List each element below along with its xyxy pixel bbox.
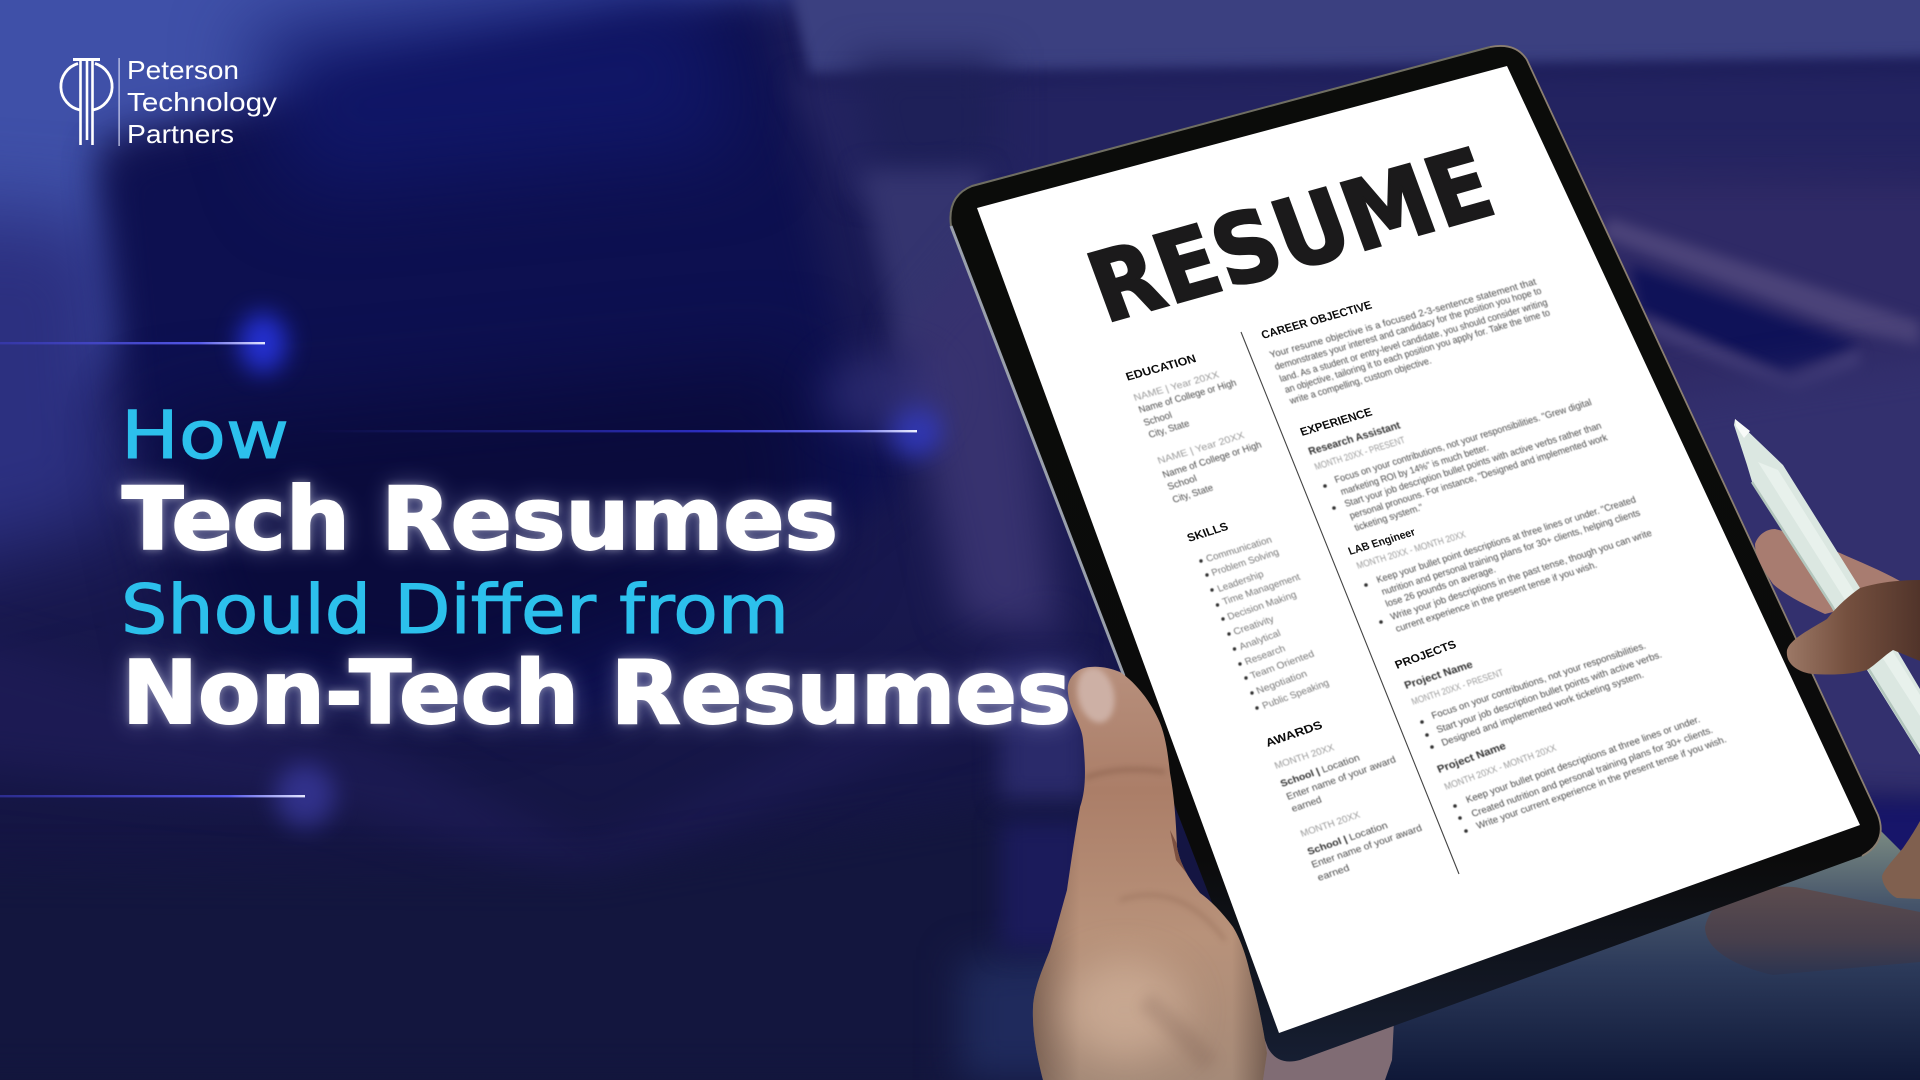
front finger over stylus: [1787, 580, 1920, 675]
tablet: [950, 46, 1881, 1062]
section: projects: MONTH 20XX - MONTH 20XX: [1443, 743, 1559, 793]
section: awards: School | Location: [1306, 820, 1390, 858]
section: education: City, State: [1171, 483, 1215, 506]
section: education: Name of College or High: [1137, 378, 1238, 416]
section: experience: Start your job description bullet points with active verbs rather than: [1343, 421, 1603, 510]
resume heading: RESUME: [1074, 127, 1508, 345]
section: skills: Negotiation: [1255, 669, 1309, 697]
title: How: [121, 397, 289, 474]
logo: Peterson Technology Partners: Technology: [127, 87, 277, 117]
tablet body: [950, 46, 1881, 1062]
section: education: EDUCATION: [1124, 353, 1198, 384]
section: experience: MONTH 20XX - PRESENT: [1313, 435, 1407, 473]
section: projects: Start your job description bullet points with active verbs.: [1435, 650, 1664, 736]
section: experience: nutrition and personal training plans for 30+ clients, helping clients: [1380, 508, 1642, 598]
section: experience: EXPERIENCE: [1299, 407, 1374, 439]
section: experience: LAB Engineer: [1347, 526, 1418, 558]
tablet screen: [977, 66, 1860, 1033]
section: projects: Designed and implemented work ticketing system.: [1440, 670, 1646, 749]
section: career objective: an objective, tailoring it to each position you apply for. Take the time to: [1283, 308, 1552, 396]
section: projects: Write your current experience in the present tense if you wish.: [1475, 734, 1728, 832]
index fingertip behind stylus: [1755, 529, 1900, 614]
section: experience: Research Assistant: [1307, 419, 1403, 458]
section: career objective: write a compelling, custom objective.: [1287, 356, 1433, 407]
section: education: [1124, 353, 1263, 506]
section: projects: Keep your bullet point descriptions at three lines or under.: [1464, 714, 1702, 806]
section: education: NAME | Year 20XX: [1156, 430, 1247, 467]
glow accent lines: [0, 313, 941, 828]
section: career objective: CAREER OBJECTIVE: [1260, 300, 1374, 342]
section: skills: Communication: [1204, 535, 1274, 565]
section: skills: Analytical: [1238, 628, 1283, 653]
section: career objective: Your resume objective is a focused 2-3-sentence statement that: [1268, 277, 1538, 361]
lower right finger: [1882, 821, 1920, 899]
section: education: School: [1166, 473, 1199, 493]
section: awards: MONTH 20XX: [1299, 810, 1362, 840]
section: experience: [1299, 397, 1654, 635]
section: skills: Decision Making: [1226, 590, 1298, 623]
section: career objective: demonstrates your interest and candidacy for the position you hope to: [1273, 286, 1543, 373]
logo: Peterson Technology Partners: Peterson: [127, 55, 239, 85]
section: education: City, State: [1147, 418, 1191, 441]
section: skills: Creativity: [1232, 614, 1276, 638]
section: projects: Focus on your contributions, not your responsibilities.: [1430, 641, 1648, 722]
section: experience: ticketing system.": [1353, 502, 1425, 534]
section: experience: marketing ROI by 14%" is much better.: [1339, 443, 1490, 498]
section: skills: Research: [1243, 643, 1287, 668]
section: projects: Created nutrition and personal training plans for 30+ clients.: [1470, 725, 1715, 820]
section: experience: lose 26 pounds on average.: [1384, 564, 1498, 610]
section: awards: [1264, 719, 1424, 884]
section: awards: earned: [1290, 795, 1323, 815]
section: awards: School | Location: [1279, 753, 1362, 790]
section: education: School: [1142, 410, 1174, 429]
column divider: [1241, 332, 1459, 874]
title: Should Differ from: [121, 571, 789, 650]
title: [121, 397, 1071, 744]
section: awards: Enter name of your award: [1285, 754, 1398, 803]
section: skills: Time Management: [1221, 572, 1302, 608]
palm behind tablet: [1260, 1000, 1395, 1080]
title: Tech Resumes: [122, 470, 838, 570]
title: Non-Tech Resumes: [122, 642, 1071, 744]
section: projects: [1393, 639, 1728, 833]
logo mark: [61, 60, 112, 145]
bottom right gradient surface: [1280, 830, 1920, 1080]
section: skills: Problem Solving: [1210, 547, 1281, 579]
section: awards: earned: [1316, 863, 1351, 884]
section: awards: Enter name of your award: [1310, 823, 1424, 871]
section: experience: current experience in the present tense if you wish.: [1394, 560, 1599, 635]
thumb of lower right hand: [1705, 887, 1920, 975]
section: skills: Public Speaking: [1261, 678, 1331, 712]
section: experience: Keep your bullet point descriptions at three lines or under. "Created: [1375, 495, 1638, 586]
logo: Peterson Technology Partners: [61, 55, 277, 149]
section: career objective: [1260, 277, 1552, 407]
section: skills: [1186, 521, 1331, 712]
left hand holding tablet: [1033, 664, 1267, 1080]
section: skills: SKILLS: [1186, 521, 1231, 545]
section: skills: Team Oriented: [1249, 649, 1316, 682]
section: experience: Write your job descriptions in the past tense, though you can write: [1389, 528, 1654, 623]
section: skills: Leadership: [1216, 569, 1266, 595]
section: projects: MONTH 20XX - PRESENT: [1410, 668, 1505, 708]
logo: Peterson Technology Partners: Partners: [127, 119, 234, 149]
section: education: Name of College or High: [1161, 440, 1263, 481]
section: projects: Project Name: [1435, 740, 1508, 776]
section: projects: Project Name: [1403, 659, 1475, 692]
section: experience: MONTH 20XX - MONTH 20XX: [1355, 529, 1468, 572]
section: education: NAME | Year 20XX: [1132, 369, 1221, 404]
section: awards: AWARDS: [1264, 719, 1325, 750]
section: experience: Focus on your contributions, not your responsibilities. "Grew digital: [1333, 397, 1593, 486]
stylus: [1734, 419, 1920, 755]
section: career objective: land. As a student or entry-level candidate, you should consider writing: [1278, 297, 1549, 385]
section: experience: personal pronouns. For instance, "Designed and implemented work: [1348, 432, 1609, 522]
section: projects: PROJECTS: [1393, 639, 1459, 672]
section: awards: MONTH 20XX: [1273, 742, 1337, 772]
